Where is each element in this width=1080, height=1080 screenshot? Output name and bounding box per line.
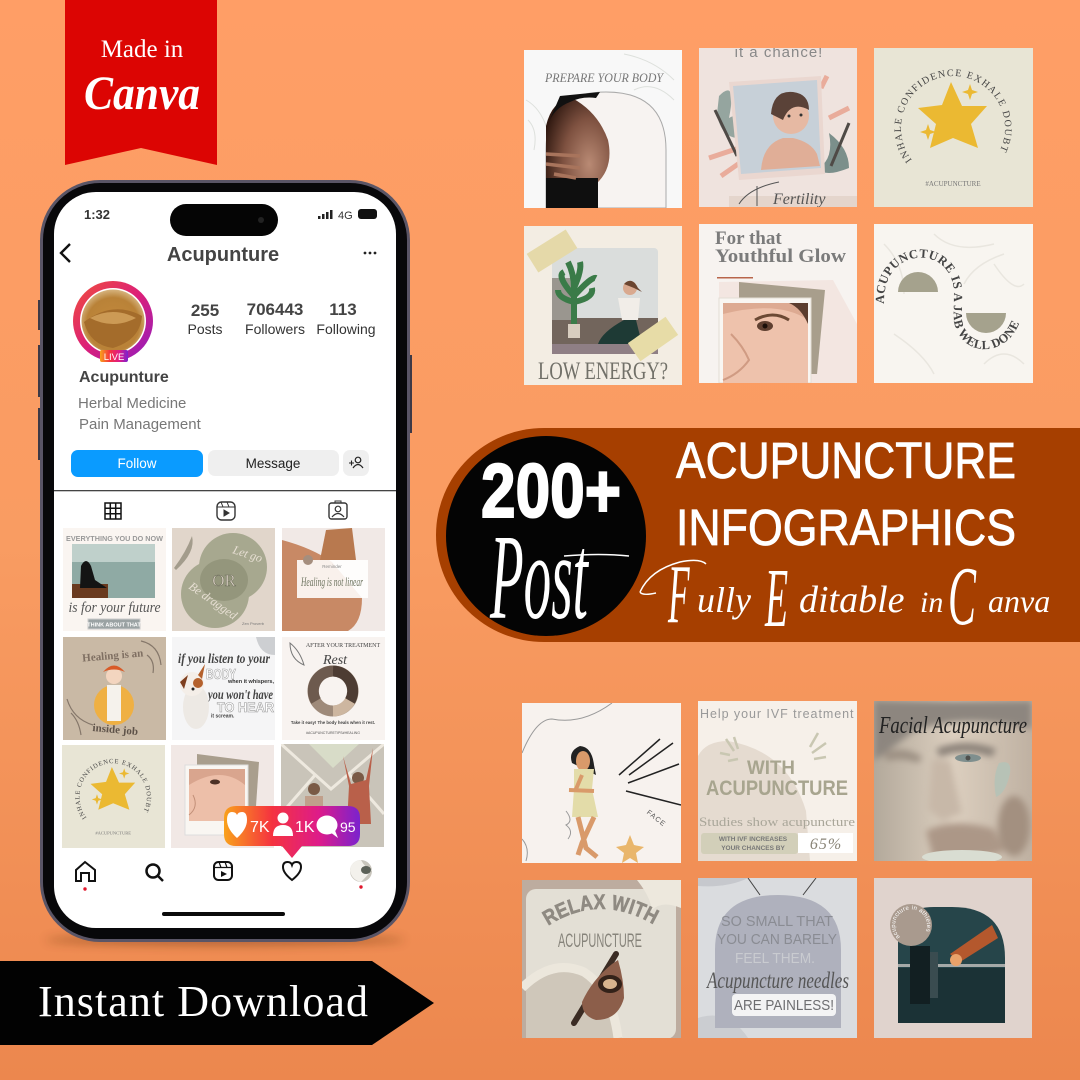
bio text: Pain Management xyxy=(79,416,202,433)
post thumbnail: people stretching xyxy=(281,744,384,847)
banner background xyxy=(436,428,1080,642)
thumbnail: IVF with acupuncture: WITH IVF INCREASES xyxy=(719,836,788,843)
post thumbnail: everything you do now: THINK ABOUT THAT xyxy=(87,622,141,628)
status bar: 4G xyxy=(338,210,353,222)
action buttons: Message xyxy=(246,456,300,471)
title: INFOGRAPHICS xyxy=(676,499,1016,556)
post thumbnail: after your treatment: #ACUPUNCTURETIPS#HEALING xyxy=(306,731,360,735)
thumbnail: acupuncture is a jab well done xyxy=(874,224,1033,383)
black circle badge: Post xyxy=(490,510,589,645)
status bar: 1:32 xyxy=(84,207,110,222)
thumbnail: inhale confidence star: #ACUPUNCTURE xyxy=(925,180,981,188)
engagement badge: 1K xyxy=(295,819,315,836)
subtitle: F xyxy=(667,548,690,640)
thumbnail: IVF with acupuncture: 65% xyxy=(810,836,842,853)
post thumbnail: inhale exhale star: #ACUPUNCTURE xyxy=(95,830,131,835)
post thumbnail: after your treatment: Take it easy! The body heals when it rest. xyxy=(291,720,375,725)
subtitle xyxy=(640,548,1050,645)
thumbnail: relax with acupuncture xyxy=(522,880,681,1038)
thumbnail: IVF with acupuncture: Help your IVF treatment xyxy=(700,707,854,721)
subtitle: anva xyxy=(988,583,1050,619)
post thumbnail: healing is an inside job: inside job xyxy=(92,722,138,738)
subtitle: ully xyxy=(697,580,751,620)
post thumbnail: inhale exhale star xyxy=(62,745,165,848)
thumbnail: face needles: FACE xyxy=(645,809,667,828)
profile stats: Followers xyxy=(245,321,305,337)
avatar with live ring xyxy=(73,281,153,363)
badge: Made in Canva: Canva xyxy=(84,67,200,120)
post thumbnail: healing is not linear: Reminder xyxy=(322,564,342,569)
post thumbnail: after your treatment xyxy=(282,637,385,740)
post thumbnail: let go or be dragged xyxy=(172,528,275,631)
thumbnail: inhale confidence star: INHALE CONFIDENCE EXHALE DOUBT xyxy=(894,69,1012,164)
thumbnail: give it a chance xyxy=(699,48,857,207)
thumbnail: low energy xyxy=(524,226,682,385)
post thumbnail: healing is an inside job xyxy=(63,637,166,740)
action buttons xyxy=(71,450,369,477)
black circle badge: 200+ xyxy=(481,449,621,534)
subtitle: ditable xyxy=(799,579,905,621)
phone mockup: Instagram profile xyxy=(38,180,412,950)
profile stats xyxy=(187,300,376,337)
profile tab icons xyxy=(105,501,347,520)
post thumbnail: everything you do now xyxy=(63,528,166,631)
avatar with live ring: LIVE xyxy=(104,352,124,363)
black circle badge xyxy=(446,436,646,645)
thumbnail: so small that you can barely feel them: FEEL THEM. xyxy=(735,950,815,967)
bio text xyxy=(78,369,202,433)
badge: Made in Canva xyxy=(65,0,217,165)
hero banner: 200+ post xyxy=(436,428,1080,645)
thumbnail: so small that you can barely feel them: ARE PAINLESS! xyxy=(734,997,834,1014)
call to action: instant download: Instant Download xyxy=(38,977,368,1026)
post thumbnail: listen to your body: BODY xyxy=(206,666,236,683)
engagement badge: 95 xyxy=(340,819,356,835)
profile stats: 255 xyxy=(191,301,219,320)
subtitle: in xyxy=(920,586,943,619)
thumbnail: inhale confidence star xyxy=(874,48,1033,207)
post thumbnail: healing is not linear xyxy=(282,528,385,631)
thumbnail: IVF with acupuncture xyxy=(698,701,857,861)
post thumbnail: let go or be dragged: Let go xyxy=(230,542,264,565)
post thumbnail: after your treatment: Rest xyxy=(322,653,348,668)
thumbnail: acupuncture in athletes xyxy=(874,878,1032,1038)
profile stats: 706443 xyxy=(247,300,303,319)
badge: Made in Canva: Made in xyxy=(101,36,184,63)
profile stats: Posts xyxy=(187,321,223,337)
profile stats: Following xyxy=(316,321,376,337)
thumbnail: acupuncture in athletes: acupuncture in athletes xyxy=(892,905,931,938)
thumbnail: prepare your body xyxy=(524,50,682,208)
thumbnail: acupuncture is a jab well done: ACUPUNCTURE IS A JAB WELL DONE xyxy=(876,249,1020,350)
post thumbnail: youthful glow crop xyxy=(171,745,274,848)
thumbnail: IVF with acupuncture: YOUR CHANCES BY xyxy=(721,845,785,852)
thumbnail: youthful glow xyxy=(699,224,857,383)
post thumbnail: listen to your body xyxy=(172,637,275,740)
post thumbnail: let go or be dragged: Zen Proverb xyxy=(242,621,265,626)
engagement badge: 7K xyxy=(250,819,270,836)
action buttons: Follow xyxy=(117,456,157,471)
notification dots xyxy=(83,885,363,891)
post thumbnail: listen to your body: it scream. xyxy=(211,714,235,720)
post thumbnail: listen to your body: when it whispers, xyxy=(227,679,274,685)
thumbnail: so small that you can barely feel them xyxy=(698,878,857,1038)
thumbnail: so small that you can barely feel them: SO SMALL THAT xyxy=(721,913,833,930)
title: ACUPUNCTURE xyxy=(676,432,1016,489)
status bar xyxy=(84,204,377,236)
home indicator xyxy=(162,912,285,916)
bio text: Herbal Medicine xyxy=(78,395,186,412)
post thumbnail: let go or be dragged: Be dragged xyxy=(186,579,241,623)
post thumbnail: inhale exhale star: INHALE CONFIDENCE EXHALE DOUBT xyxy=(75,758,152,820)
post thumbnail: after your treatment: AFTER YOUR TREATMENT xyxy=(306,643,380,649)
thumbnail: youthful glow: For that xyxy=(715,228,782,249)
post thumbnail: healing is an inside job: Healing is an xyxy=(82,647,144,665)
thumbnail: IVF with acupuncture: WITH xyxy=(747,758,795,779)
bottom navigation icons xyxy=(76,860,372,882)
thumbnail: youthful glow: Youthful Glow xyxy=(715,246,846,267)
phone body xyxy=(38,180,412,945)
subtitle: C xyxy=(948,551,976,643)
title xyxy=(676,432,1016,556)
thumbnail: relax with acupuncture: RELAX WITH xyxy=(542,894,660,926)
thumbnail: face needles xyxy=(522,703,681,863)
post thumbnail: let go or be dragged: OR xyxy=(212,571,236,590)
thumbnail: so small that you can barely feel them: YOU CAN BARELY xyxy=(717,931,837,948)
thumbnail: prepare your body: PREPARE YOUR BODY xyxy=(544,70,665,85)
subtitle: E xyxy=(764,552,788,645)
bio text: Acupunture xyxy=(79,369,169,386)
profile header xyxy=(61,244,376,266)
post thumbnail: everything you do now: EVERYTHING YOU DO NOW xyxy=(66,536,163,543)
call to action: instant download xyxy=(0,961,434,1045)
engagement badge xyxy=(224,806,360,858)
profile stats: 113 xyxy=(329,300,357,319)
thumbnail: facial acupuncture xyxy=(874,701,1032,861)
profile header: Acupunture xyxy=(167,244,279,266)
thumbnail: IVF with acupuncture: Studies show acupuncture xyxy=(699,815,856,829)
